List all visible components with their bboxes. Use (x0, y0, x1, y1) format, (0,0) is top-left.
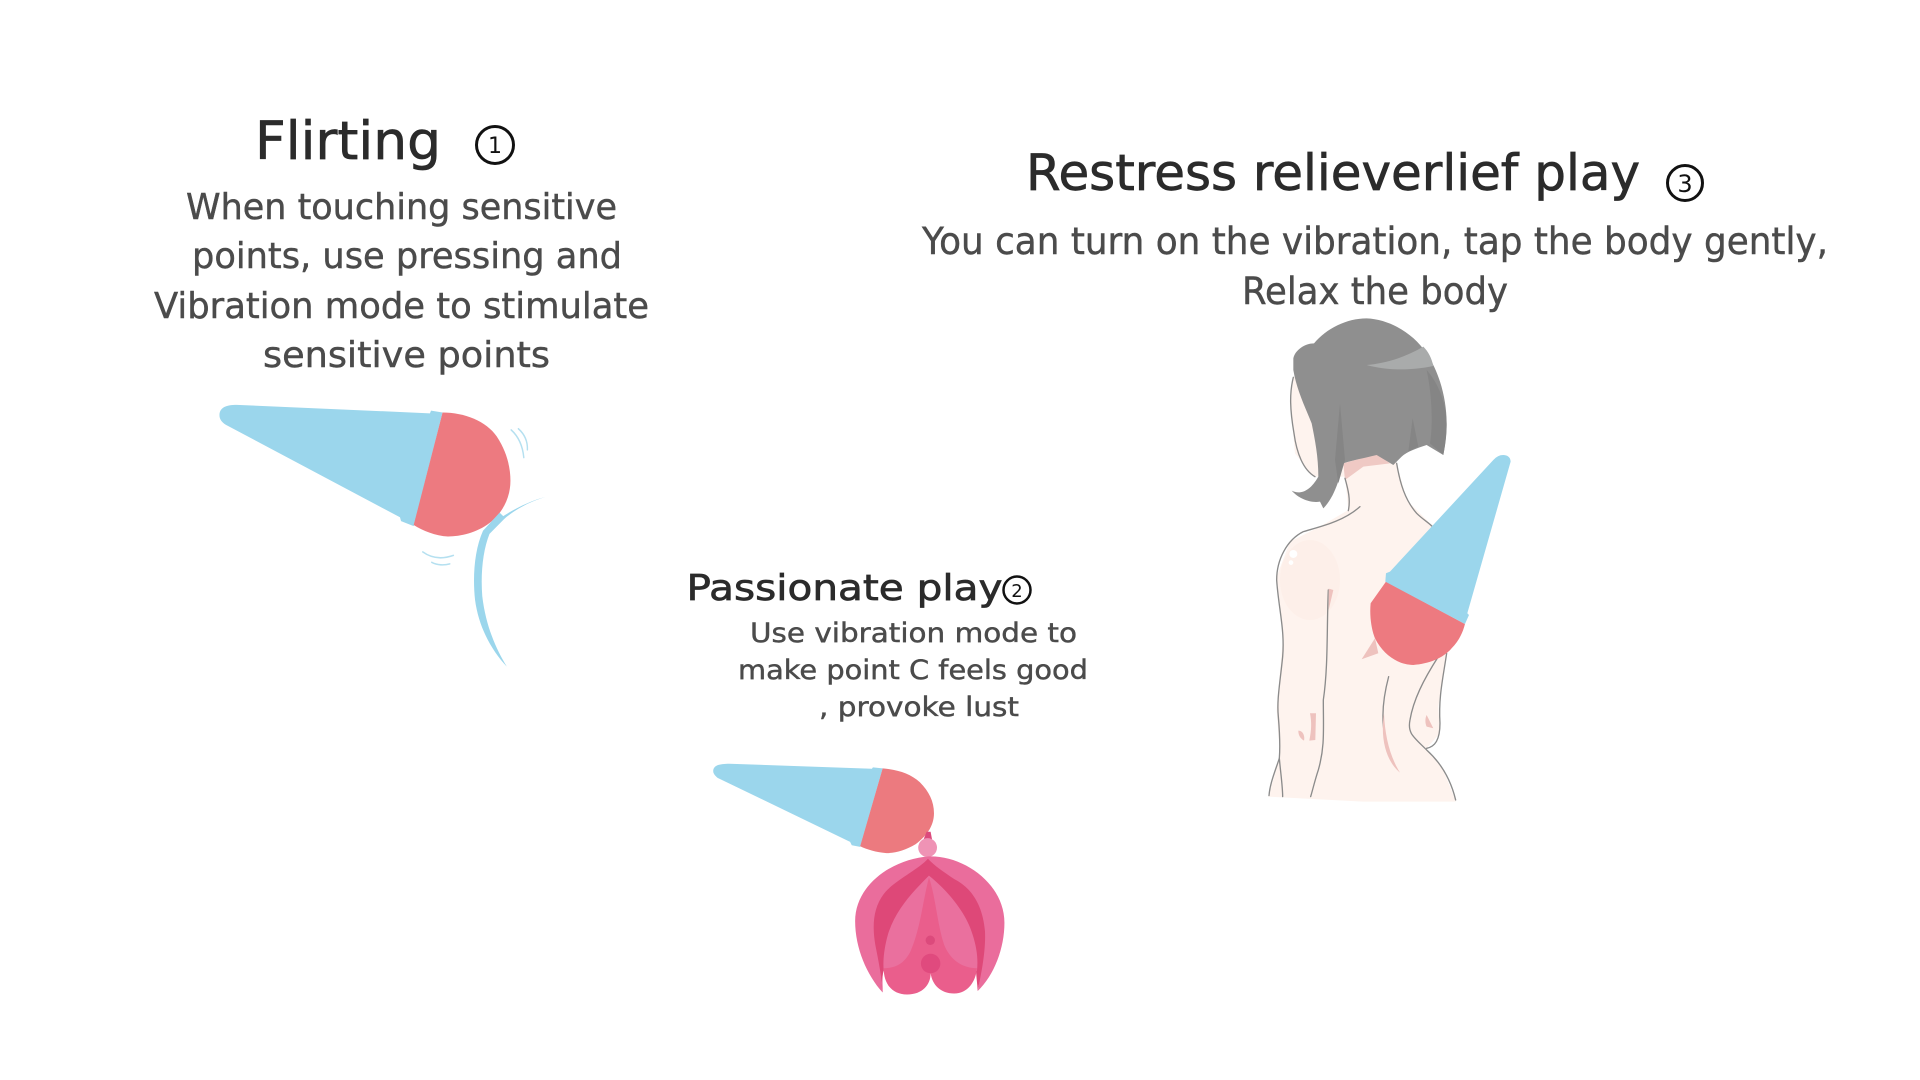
vibration marks (423, 429, 527, 565)
number badge 2 (1004, 576, 1030, 604)
hair (1292, 318, 1447, 508)
number badge 3: 3 (1677, 170, 1693, 198)
hair highlight (1367, 347, 1433, 369)
hair shade (1335, 370, 1447, 483)
shoulder highlights (1289, 550, 1297, 565)
device head (414, 413, 510, 537)
inner folds (883, 876, 977, 971)
number badge 2: 2 (1011, 581, 1023, 602)
device head (1370, 582, 1465, 665)
body outlines (1269, 377, 1456, 800)
text block: flirting description: When touching sensitive (186, 187, 617, 228)
text block: flirting description: sensitive points (263, 335, 550, 376)
small dot (926, 936, 935, 945)
small dark tip (923, 832, 932, 841)
text block: stress relief description (921, 220, 1828, 313)
text block: flirting description: points, use pressing and (192, 236, 622, 277)
device head (860, 768, 934, 853)
icon: massager touching a curve (219, 405, 545, 667)
shoulder blush (1280, 540, 1340, 620)
skin shading marks (1298, 589, 1433, 773)
device handle (1385, 455, 1511, 624)
panel: flirting (154, 111, 649, 667)
touched curve (474, 497, 545, 667)
large dot (921, 954, 940, 973)
dark inner shape (874, 859, 985, 993)
centre shape (884, 877, 977, 995)
number badge 1 (476, 126, 514, 164)
device handle (713, 764, 883, 847)
small round bud (918, 838, 937, 857)
neck shadow (1343, 454, 1390, 480)
device handle (219, 405, 443, 526)
text block: flirting description: Vibration mode to stimulate (154, 286, 649, 327)
text block: passionate description: , provoke lust (819, 692, 1019, 723)
text block: passionate description: make point C feels good (738, 655, 1088, 686)
illustration: woman from behind with massager (1268, 318, 1511, 802)
number badge 3 (1668, 166, 1702, 200)
outer shape (855, 856, 1004, 993)
panel: stress relief play (921, 144, 1828, 802)
icon: massager above stylised anatomy (713, 764, 1004, 995)
panel: passionate play (686, 568, 1088, 995)
body skin (1268, 377, 1457, 802)
number badge 1: 1 (488, 134, 502, 159)
text block: stress relief description: Relax the body (1242, 270, 1508, 313)
text block: flirting description (154, 187, 649, 376)
heading: stress relief play: Restress relieverlief play (1026, 144, 1640, 202)
text block: passionate description: Use vibration mode to (750, 618, 1077, 649)
heading: flirting: Flirting (255, 111, 441, 172)
text block: passionate description (738, 618, 1088, 723)
text block: stress relief description: You can turn on the vibration, tap the body gently, (921, 220, 1828, 263)
heading: passionate play: Passionate play (686, 568, 1002, 609)
